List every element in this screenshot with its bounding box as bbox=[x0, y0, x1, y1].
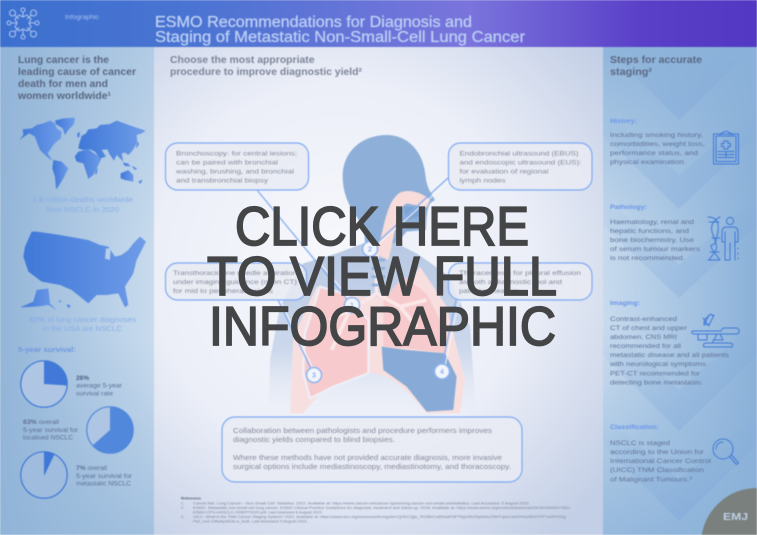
references: Cancer.Net. Lung Cancer – Non-Small Cell: Statistics. 2022. Available at: https://www.cancer.net/cancer-types/lung-cancer-non-small-cell/statistics. Last Accessed: 5 August 2022. bbox=[193, 502, 530, 506]
illustration: human torso and lungs bbox=[268, 135, 477, 420]
callout: transthoracic bbox=[166, 263, 306, 300]
callout: EBUS: for evaluation of regional bbox=[460, 168, 549, 176]
heading: lung cancer: death for men and bbox=[18, 79, 108, 90]
heading: lung cancer: Lung cancer is the bbox=[18, 55, 109, 66]
step: pathology bbox=[610, 204, 701, 262]
step: classification: (UICC) TNM Classification bbox=[610, 467, 704, 474]
callout: EBUS: and endoscopic ultrasound (EUS): bbox=[460, 160, 582, 166]
text: 26 percent bbox=[76, 375, 123, 398]
step: classification: International Cancer Control bbox=[610, 458, 712, 465]
callout: transthoracic: Transthoracic fine needle aspiration bbox=[173, 270, 297, 277]
logo: EMJ badge: EMJ bbox=[723, 511, 748, 523]
step: imaging: Imaging: bbox=[610, 300, 640, 307]
callout: thoracentesis: as both a diagnostic tool and bbox=[459, 279, 562, 286]
step: history bbox=[610, 118, 705, 166]
icon: world map bbox=[19, 118, 146, 189]
callout: transthoracic: for mid to peripheral lesions bbox=[173, 288, 274, 295]
overlay: click here call to action: INFOGRAPHIC bbox=[209, 295, 556, 357]
text: 26 percent: average 5-year bbox=[76, 383, 123, 390]
text: 7 percent: metastatic NSCLC bbox=[76, 480, 131, 488]
references: FkZ_no2-CfAsApsiEALw_wcB. Last Assessed 5 August 2022. bbox=[193, 520, 308, 524]
marker: 1 bbox=[344, 298, 360, 312]
callout: thoracentesis: palliative measure bbox=[459, 288, 519, 295]
icon: CT table bbox=[692, 314, 739, 347]
heading: choose procedure: procedure to improve diagnostic yield² bbox=[170, 67, 363, 78]
overlay: click here call to action: TO VIEW FULL bbox=[207, 245, 557, 307]
references: ESMO-CPG-mNSCLC-15SEPT2020.pdf. Last Assessed 8 August 2022. bbox=[193, 510, 323, 514]
body silhouette bbox=[268, 243, 477, 420]
step: imaging bbox=[609, 300, 730, 386]
marker: 2 bbox=[362, 242, 378, 256]
trachea rings bbox=[372, 260, 385, 285]
panel: left sidebar bbox=[0, 47, 154, 535]
heading: choose procedure: Choose the most appropriate bbox=[170, 55, 315, 66]
marker: 1: 1 bbox=[350, 302, 354, 310]
label: infographic: Infographic bbox=[65, 14, 99, 21]
references: UICC. What is the TNM Cancer Staging System? 2022. Available at: https://www.uicc.org/resources/tnm/gclid=CjOKCQjw_7KXBhCoARIsAPdPTfhjU0thZ9qnbAuTMHTqwGJzEDHVp9DiXTPFTuEPrOGg- bbox=[193, 515, 568, 519]
step: imaging: recommended for all bbox=[610, 343, 682, 350]
step: imaging: metastatic disease and all patients bbox=[610, 352, 730, 359]
icon: USA map bbox=[20, 232, 146, 310]
pleural effusion bbox=[382, 347, 457, 412]
step: history: Including smoking history, bbox=[610, 132, 703, 139]
text: 63 percent: 63% overall bbox=[23, 419, 60, 426]
airway bbox=[375, 191, 430, 260]
chart: pie 63 percent bbox=[87, 407, 133, 453]
panel: right sidebar bbox=[603, 45, 757, 535]
step: history: History: bbox=[610, 118, 637, 125]
callout: collaboration: surgical options include mediastinoscopy, mediastinotomy, and thoracoscopy. bbox=[233, 462, 511, 471]
callout: collaboration: Collaboration between pathologists and procedure performers improves bbox=[233, 426, 492, 435]
callout: collaboration: diagnostic yields compared to blind biopsies. bbox=[233, 435, 395, 444]
references: 2. bbox=[181, 506, 184, 510]
step: history: comorbidities, weight loss, bbox=[610, 141, 705, 148]
step: imaging: abdomen. CNS MRI bbox=[610, 334, 677, 341]
marker: 2: 2 bbox=[368, 246, 372, 254]
step: classification: of Malignant Tumours.³ bbox=[610, 476, 693, 484]
callout: collaboration bbox=[222, 417, 522, 482]
pleura bbox=[290, 267, 465, 413]
callout: bronchoscopy: Bronchoscopy: for central lesions; bbox=[176, 150, 297, 158]
callout: collaboration: Where these methods have not provided accurate diagnosis, more invasive bbox=[233, 453, 502, 462]
title: Staging of Metastatic Non-Small-Cell Lung Cancer bbox=[155, 29, 525, 46]
text: USA statistic bbox=[29, 315, 136, 333]
mouth cavity bbox=[403, 207, 427, 220]
step: classification: according to the Union for bbox=[610, 449, 705, 456]
text: 63 percent bbox=[23, 419, 79, 442]
overlay: click here call to action bbox=[207, 195, 557, 357]
panel: centre background bbox=[154, 47, 603, 535]
step: imaging: with neurological symptoms. bbox=[609, 361, 708, 368]
text: 7 percent: 5-year survival for bbox=[76, 473, 133, 480]
step: pathology: is not recommended. bbox=[610, 255, 685, 262]
heading: lung cancer: leading cause of cancer bbox=[18, 67, 136, 78]
marker: 4 bbox=[434, 364, 450, 379]
right lung bbox=[383, 277, 445, 353]
text: 63 percent: localised NSCLC bbox=[23, 434, 73, 442]
text: 7 percent bbox=[76, 465, 133, 488]
white neck gap bbox=[397, 231, 425, 252]
callout: EBUS: lymph nodes bbox=[460, 178, 506, 184]
callout: EBUS: Endobronchial ultrasound (EBUS) bbox=[460, 150, 578, 158]
heading: 5-year survival: 5-year survival: bbox=[18, 345, 76, 354]
icon: network logo bbox=[7, 8, 39, 39]
marker: 3: 3 bbox=[312, 372, 316, 380]
step: classification: Classification: bbox=[610, 424, 659, 431]
text: deaths statistic: 1.8 million deaths worldwide bbox=[32, 195, 133, 204]
step: history: performance status, and bbox=[610, 150, 698, 157]
step: imaging: PET-CT recommended for bbox=[610, 370, 701, 378]
references: 1. bbox=[181, 502, 184, 506]
title: ESMO Recommendations for Diagnosis and bbox=[155, 14, 472, 31]
step: history: physical examination. bbox=[610, 159, 686, 166]
heading: choose procedure bbox=[170, 55, 363, 78]
step: pathology: Haematology, renal and bbox=[610, 219, 694, 226]
heading: steps for staging: staging² bbox=[610, 67, 653, 78]
callout: thoracentesis: Thoracentesis for pleural effusion bbox=[459, 270, 581, 277]
text: deaths statistic bbox=[32, 195, 133, 214]
step: imaging: detecting bone metastasis. bbox=[610, 380, 703, 386]
step: classification bbox=[610, 424, 712, 484]
step: classification: NSCLC is staged bbox=[610, 440, 670, 447]
text: USA statistic: 82% of lung cancer diagnoses bbox=[29, 315, 136, 324]
callout lines bbox=[257, 178, 459, 375]
heading: lung cancer: women worldwide¹ bbox=[17, 91, 112, 102]
step: imaging: CT of chest and upper bbox=[610, 325, 688, 332]
step: imaging: Contrast-enhanced bbox=[610, 316, 677, 323]
step: pathology: bone biochemistry. Use bbox=[610, 237, 694, 244]
heading: steps for staging bbox=[610, 55, 702, 78]
heading: steps for staging: Steps for accurate bbox=[610, 55, 702, 66]
callout: bronchoscopy: washing, brushing, and bronchial bbox=[175, 168, 295, 176]
marker: 3 bbox=[306, 368, 322, 382]
references: References bbox=[181, 496, 201, 500]
title bbox=[155, 14, 525, 46]
references: 3. bbox=[181, 515, 184, 519]
text: 7 percent: 7% overall bbox=[76, 465, 108, 472]
callout: bronchoscopy: and transbronchial biopsy bbox=[176, 178, 269, 184]
icon: magnifying glass bbox=[713, 439, 738, 464]
callout: thoracentesis bbox=[448, 263, 592, 300]
step: pathology: Pathology: bbox=[610, 204, 647, 211]
left lung bbox=[303, 287, 368, 398]
logo: EMJ badge bbox=[702, 488, 757, 535]
text: 26 percent: 26% bbox=[76, 375, 89, 382]
header bar bbox=[0, 0, 757, 47]
overlay: click here call to action: CLICK HERE bbox=[235, 195, 529, 257]
callout: EBUS bbox=[448, 143, 592, 190]
text: USA statistic: in the USA are NSCLC bbox=[43, 324, 122, 333]
icon: clipboard bbox=[714, 131, 738, 164]
head bbox=[343, 135, 435, 243]
text: 26 percent: survival rate bbox=[76, 390, 113, 398]
bronchi bbox=[330, 253, 427, 350]
step: pathology: hepatic functions, and bbox=[610, 228, 689, 235]
icon: DNA and person bbox=[708, 217, 738, 260]
callout: transthoracic: under imaging guidance (often CT) bbox=[173, 279, 297, 286]
heading: lung cancer bbox=[17, 55, 136, 102]
text: deaths statistic: from NSCLC in 2020 bbox=[46, 205, 119, 214]
references: ESMO. Metastatic non-small cell lung cancer: ESMO Clinical Practice Guidelines for diagnosis, treatment and follow-up. 2018. Available at: https://www.esmo.org/content/download/347819/6934778/1/ bbox=[193, 506, 571, 510]
references bbox=[181, 496, 571, 524]
step: pathology: of serum tumour markers bbox=[610, 246, 701, 253]
marker: 4: 4 bbox=[440, 369, 444, 376]
chart: pie 7 percent bbox=[21, 452, 67, 498]
callout: bronchoscopy bbox=[166, 143, 308, 190]
chart: pie 26 percent bbox=[21, 361, 67, 407]
callout: bronchoscopy: can be paired with bronchial bbox=[176, 160, 279, 166]
text: 63 percent: 5-year survival for bbox=[23, 427, 79, 434]
